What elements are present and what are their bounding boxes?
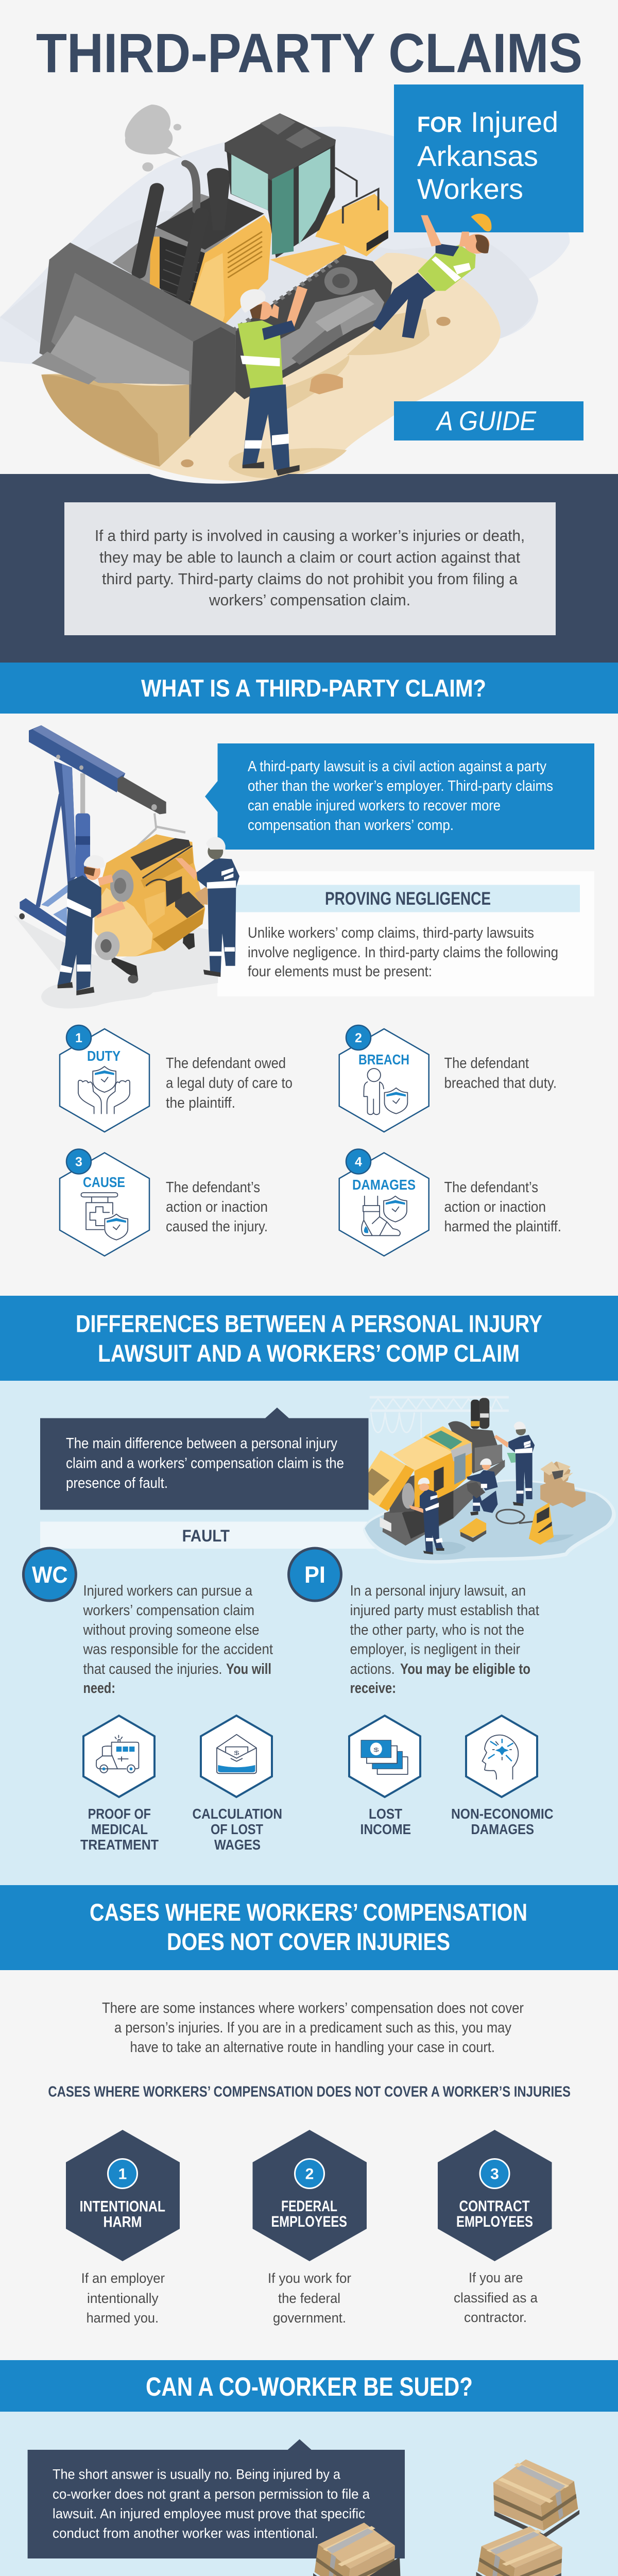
section heading: cases not covered: DOES NOT COVER INJURIES [167, 1928, 450, 1955]
subtitle box: Workers [417, 173, 523, 205]
callout: short answer: The short answer is usually no. Being injured by a [53, 2467, 341, 2482]
element 3: cause [60, 1149, 268, 1256]
subtitle box: Injured [471, 106, 558, 138]
icon: ambulance [96, 1735, 139, 1773]
intro text: instances not covered: There are some instances where workers’ compensation does not cover [102, 2000, 524, 2016]
number 3: 3 [490, 2166, 499, 2182]
navy intro band: they may be able to launch a claim or court action against that [99, 548, 520, 566]
icon: head with pain burst [482, 1735, 518, 1779]
element 3: cause: CAUSE [83, 1174, 125, 1190]
item: calculation of lost wages: CALCULATION [193, 1806, 282, 1822]
item: non-economic damages [451, 1716, 553, 1837]
column: workers' comp [23, 1548, 273, 1697]
case 2: federal employees [252, 2130, 367, 2326]
callout: short answer [28, 2439, 405, 2558]
badge 2: 2 [355, 1031, 362, 1045]
section heading: differences [0, 1296, 618, 1381]
item: calculation of lost wages [193, 1716, 282, 1853]
icon: envelope with money: $ [234, 1750, 239, 1756]
case 2: federal employees: the federal [278, 2291, 340, 2306]
badge: PI [288, 1548, 341, 1601]
element 1: duty [60, 1025, 293, 1132]
badge 1: 1 [75, 1031, 82, 1045]
number 3 [480, 2159, 509, 2189]
item: calculation of lost wages: WAGES [214, 1837, 261, 1853]
case 3: contract employees: EMPLOYEES [456, 2213, 533, 2230]
callout: third-party lawsuit definition: compensation than workers’ comp. [248, 817, 454, 834]
element 1: duty: the plaintiff. [166, 1095, 235, 1111]
navy intro band: third party. Third-party claims do not prohibit you from filing a [102, 570, 518, 588]
element 3: cause: caused the injury. [166, 1218, 268, 1235]
number 2 [295, 2159, 324, 2189]
case 3: contract employees: classified as a [454, 2290, 538, 2306]
panel: proving negligence: Unlike workers’ comp claims, third-party lawsuits [248, 925, 534, 941]
standing mechanic [494, 1421, 535, 1506]
column: workers' comp: workers’ compensation claim [83, 1602, 254, 1619]
case 1: intentional harm: harmed you. [87, 2310, 159, 2326]
badge 4 [346, 1149, 371, 1174]
illustration: forklift accident with falling boxes [313, 2460, 618, 2576]
element 1: duty: DUTY [87, 1048, 121, 1064]
case 2: federal employees: EMPLOYEES [271, 2213, 347, 2230]
callout: main difference: presence of fault. [66, 1475, 168, 1492]
section heading: differences: LAWSUIT AND A WORKERS’ COMP CLAIM [98, 1340, 520, 1367]
element 2: breach: The defendant [444, 1055, 529, 1072]
column: personal injury: You may be eligible to [400, 1661, 530, 1677]
number 1: 1 [118, 2166, 127, 2182]
front mechanic [409, 1478, 444, 1554]
item: non-economic damages: DAMAGES [471, 1821, 534, 1837]
badge 3 [66, 1149, 91, 1174]
item: calculation of lost wages: OF LOST [211, 1821, 263, 1837]
icon: envelope with money [217, 1735, 256, 1773]
column: workers' comp: that caused the injuries. [83, 1661, 222, 1677]
element 3: cause: The defendant’s [166, 1179, 260, 1196]
hands and hard hat over the subtitle box [421, 214, 491, 246]
badge 2 [346, 1025, 371, 1050]
badge 3: 3 [75, 1155, 82, 1170]
element 4: damages: The defendant’s [444, 1179, 538, 1196]
case 3: contract employees [438, 2130, 552, 2325]
callout: short answer: co-worker does not grant a person permission to file a [53, 2486, 370, 2502]
item: lost income [349, 1716, 420, 1837]
item: proof of medical treatment: MEDICAL [91, 1821, 148, 1837]
intro text: instances not covered: have to take an alternative route in handling your case in court. [130, 2039, 495, 2056]
element 1: duty: The defendant owed [166, 1055, 286, 1072]
injured worker falling [372, 214, 491, 338]
column: workers' comp: was responsible for the accident [83, 1641, 273, 1658]
panel: proving negligence: four elements must be present: [248, 963, 432, 980]
badge: PI: PI [304, 1562, 325, 1588]
element 2: breach: breached that duty. [444, 1075, 557, 1091]
icon: stack of bills: $ [373, 1747, 379, 1753]
case 1: intentional harm: INTENTIONAL [80, 2198, 165, 2215]
column: personal injury: actions. [350, 1661, 395, 1677]
badge: WC [23, 1548, 76, 1601]
element 1: duty: a legal duty of care to [166, 1075, 293, 1091]
column: personal injury: receive: [350, 1680, 396, 1697]
number 1 [108, 2159, 137, 2189]
subtitle box: Arkansas [417, 140, 538, 172]
item: proof of medical treatment: PROOF OF [88, 1806, 151, 1822]
subtitle box: FOR [417, 112, 462, 137]
column: workers' comp: Injured workers can pursue a [83, 1583, 253, 1599]
illustration: machine maintenance crew [355, 1397, 616, 1564]
case 2: federal employees: If you work for [268, 2270, 351, 2286]
column: workers' comp: need: [83, 1680, 115, 1697]
badge: WC: WC [32, 1562, 68, 1588]
item: non-economic damages: NON-ECONOMIC [451, 1806, 553, 1822]
column: personal injury [288, 1548, 539, 1697]
column: personal injury: the other party, who is not the [350, 1622, 524, 1638]
section heading: what is a third-party claim [0, 663, 618, 714]
item: proof of medical treatment: TREATMENT [80, 1837, 159, 1853]
panel: proving negligence: PROVING NEGLIGENCE [325, 889, 491, 909]
navy intro band [0, 474, 618, 663]
case 1: intentional harm: intentionally [87, 2291, 159, 2306]
callout: main difference: The main difference between a personal injury [66, 1435, 337, 1452]
element 3: cause: action or inaction [166, 1199, 268, 1215]
icon: stack of bills [361, 1740, 408, 1774]
mechanic on the right [175, 837, 239, 977]
item: lost income: INCOME [360, 1821, 411, 1837]
navy intro band: workers’ compensation claim. [209, 591, 410, 609]
badge 4: 4 [355, 1155, 362, 1170]
case 3: contract employees: If you are [469, 2270, 523, 2285]
callout: main difference [40, 1408, 369, 1510]
section heading: can a co-worker be sued [0, 2360, 618, 2412]
element 4: damages [339, 1149, 561, 1256]
panel: proving negligence [217, 871, 594, 996]
column: personal injury: employer, is negligent in their [350, 1641, 520, 1658]
icon: hands holding shield [78, 1066, 130, 1114]
section heading: what is a third-party claim: WHAT IS A THIRD-PARTY CLAIM? [141, 674, 486, 702]
column: personal injury: In a personal injury lawsuit, an [350, 1583, 526, 1599]
section heading: differences: DIFFERENCES BETWEEN A PERSONAL INJURY [76, 1310, 542, 1337]
column: personal injury: injured party must establish that [350, 1602, 539, 1619]
icon: person with shield [364, 1069, 407, 1114]
element 2: breach [339, 1025, 557, 1132]
subtitle box [394, 84, 583, 232]
hero illustration: bulldozer and injured worker [0, 105, 570, 481]
icon: hospital with shield [81, 1193, 128, 1240]
fault bar [40, 1522, 376, 1549]
guide label: A GUIDE [435, 406, 537, 436]
element 4: damages: harmed the plaintiff. [444, 1218, 561, 1235]
fault bar: FAULT [182, 1527, 230, 1545]
intro text: instances not covered [102, 2000, 524, 2056]
navy intro band: If a third party is involved in causing a worker’s injuries or death, [95, 527, 525, 545]
case 2: federal employees: government. [273, 2310, 346, 2326]
number 2: 2 [305, 2166, 314, 2182]
column: workers' comp: without proving someone else [83, 1622, 260, 1638]
case 1: intentional harm: If an employer [81, 2270, 165, 2286]
callout: short answer: conduct from another worker was intentional. [53, 2526, 318, 2541]
mechanic on the left [58, 855, 125, 995]
forklift [361, 2557, 447, 2576]
kneeling mechanic [467, 1459, 498, 1516]
case 3: contract employees: CONTRACT [459, 2198, 529, 2215]
guide label [394, 401, 583, 440]
section heading: can a co-worker be sued: CAN A CO-WORKER BE SUED? [146, 2372, 473, 2401]
case 3: contract employees: contractor. [464, 2310, 527, 2325]
callout: main difference: claim and a workers’ compensation claim is the [66, 1455, 344, 1471]
case 1: intentional harm: HARM [103, 2214, 142, 2231]
case 2: federal employees: FEDERAL [281, 2198, 337, 2215]
callout: third-party lawsuit definition [205, 743, 594, 850]
icon: injured foot with shield [362, 1196, 407, 1235]
item: lost income: LOST [369, 1806, 402, 1822]
element 4: damages: action or inaction [444, 1199, 546, 1215]
callout: third-party lawsuit definition: can enable injured workers to recover more [248, 798, 501, 814]
callout: short answer: lawsuit. An injured employee must prove that specific [53, 2506, 365, 2521]
badge 1 [66, 1025, 91, 1050]
panel: proving negligence: involve negligence. In third-party claims the following [248, 944, 558, 961]
element 2: breach: BREACH [358, 1052, 409, 1067]
section heading: cases not covered: CASES WHERE WORKERS’ COMPENSATION [90, 1899, 527, 1926]
light blue section background [0, 2412, 618, 2576]
case 1: intentional harm [66, 2130, 180, 2326]
section heading: cases not covered [0, 1885, 618, 1970]
callout: third-party lawsuit definition: A third-party lawsuit is a civil action against a party [248, 758, 546, 775]
callout: third-party lawsuit definition: other than the worker’s employer. Third-party claims [248, 778, 553, 794]
light blue section background [0, 1381, 618, 1885]
illustration: engine on hoist with two mechanics [14, 725, 239, 1008]
item: proof of medical treatment [80, 1716, 159, 1853]
intro text: instances not covered: a person’s injuries. If you are in a predicament such as this, you may [114, 2020, 511, 2036]
element 4: damages: DAMAGES [352, 1177, 416, 1193]
worker raising hands [229, 286, 307, 478]
column: workers' comp: You will [226, 1661, 271, 1677]
